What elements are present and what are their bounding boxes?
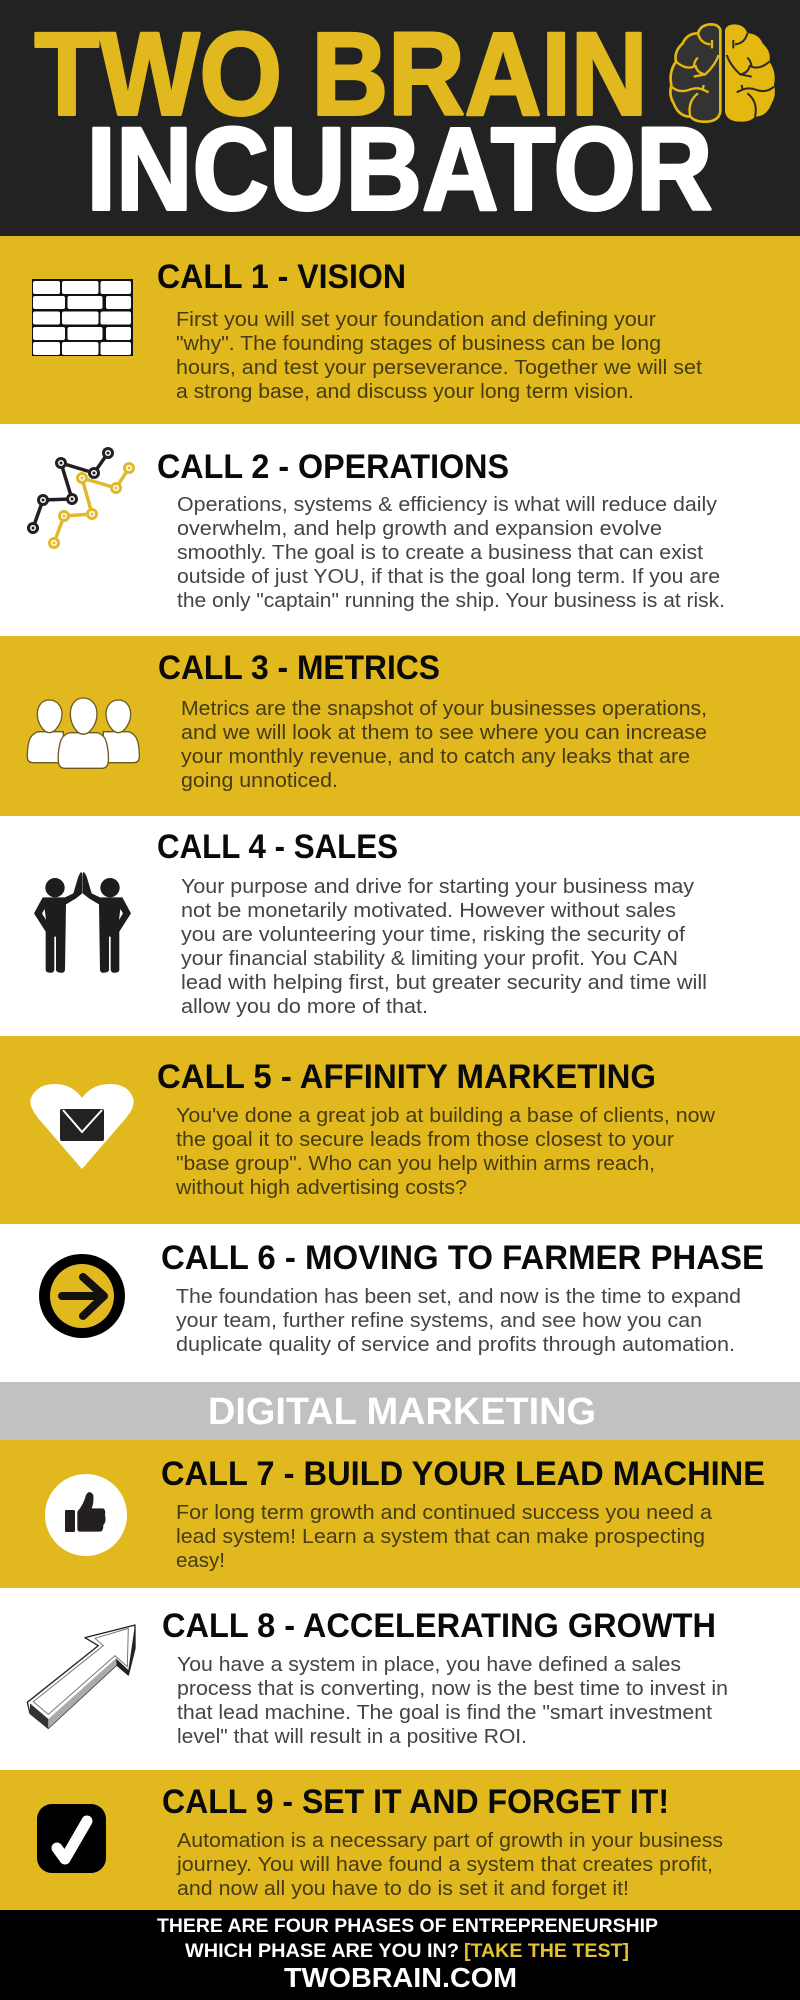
text: call 7 body: easy! bbox=[176, 1549, 225, 1572]
text: call 3 body: going unnoticed. bbox=[181, 769, 338, 792]
heading: call 4: CALL 4 - SALES bbox=[157, 828, 398, 866]
panel: header bbox=[0, 0, 800, 236]
heading: call 3: CALL 3 - METRICS bbox=[158, 649, 440, 687]
icon: heart with envelope bbox=[30, 1084, 134, 1169]
text: call 2 body: the only "captain" running the ship. Your business is at risk. bbox=[177, 589, 725, 612]
icon: arrow in circle bbox=[39, 1254, 125, 1338]
text: call 8 body: level" that will result in a positive ROI. bbox=[177, 1725, 527, 1748]
heading: call 9: CALL 9 - SET IT AND FORGET IT! bbox=[162, 1783, 669, 1821]
text: call 2 body: smoothly. The goal is to create a business that can exist bbox=[177, 541, 703, 564]
panel: call 6 moving to farmer phase bbox=[0, 1224, 800, 1382]
title: incubator: INCUBATOR bbox=[86, 104, 712, 236]
icon: brain bbox=[670, 24, 775, 122]
text: call 4 body: Your purpose and drive for starting your business may bbox=[181, 875, 695, 898]
text: call 8 body bbox=[177, 1653, 728, 1748]
heading: call 5: CALL 5 - AFFINITY MARKETING bbox=[157, 1058, 656, 1096]
panel: call 2 operations bbox=[0, 424, 800, 636]
heading: call 7: CALL 7 - BUILD YOUR LEAD MACHINE bbox=[161, 1455, 765, 1493]
text: call 2 body: Operations, systems & efficiency is what will reduce daily bbox=[177, 493, 718, 516]
text: call 6 body: The foundation has been set, and now is the time to expand bbox=[176, 1285, 741, 1308]
heading: call 6: CALL 6 - MOVING TO FARMER PHASE bbox=[161, 1239, 764, 1277]
banner heading: DIGITAL MARKETING bbox=[208, 1391, 596, 1433]
panel: footer bbox=[0, 1910, 800, 2000]
text: call 3 body: and we will look at them to see where you can increase bbox=[181, 721, 707, 744]
footer line 2: WHICH PHASE ARE YOU IN? bbox=[185, 1940, 459, 1962]
panel: call 5 affinity marketing bbox=[0, 1036, 800, 1224]
footer line 2: [TAKE THE TEST] bbox=[464, 1940, 629, 1962]
text: call 4 body: not be monetarily motivated. However without sales bbox=[181, 899, 676, 922]
text: call 1 body: "why". The founding stages of business can be long bbox=[176, 332, 661, 355]
text: call 5 body: without high advertising costs? bbox=[175, 1176, 467, 1199]
banner: digital marketing bbox=[0, 1382, 800, 1440]
text: call 8 body: You have a system in place, you have defined a sales bbox=[177, 1653, 681, 1676]
text: call 4 body: allow you do more of that. bbox=[181, 995, 428, 1018]
text: call 2 body: outside of just YOU, if that is the goal long term. If you are bbox=[177, 565, 720, 588]
icon: thumbs up in circle bbox=[45, 1474, 127, 1556]
icon: brick wall bbox=[32, 279, 133, 356]
text: call 2 body: overwhelm, and help growth and expansion evolve bbox=[177, 517, 662, 540]
text: call 3 body: your monthly revenue, and to catch any leaks that are bbox=[181, 745, 690, 768]
text: call 8 body: that lead machine. The goal is find the "smart investment bbox=[177, 1701, 712, 1724]
text: call 7 body: lead system! Learn a system that can make prospecting bbox=[176, 1525, 705, 1548]
icon: connected network lines bbox=[28, 448, 134, 548]
text: call 9 body: and now all you have to do is set it and forget it! bbox=[177, 1877, 629, 1900]
icon: sketched arrow bbox=[27, 1625, 135, 1728]
panel: call 9 set it and forget it bbox=[0, 1770, 800, 1910]
text: call 9 body: Automation is a necessary part of growth in your business bbox=[177, 1829, 723, 1852]
text: call 1 body: First you will set your foundation and defining your bbox=[176, 308, 656, 331]
text: call 5 body: "base group". Who can you help within arms reach, bbox=[176, 1152, 655, 1175]
text: call 2 body bbox=[177, 493, 725, 612]
footer website: TWOBRAIN.COM bbox=[284, 1962, 517, 1993]
text: call 5 body: You've done a great job at building a base of clients, now bbox=[176, 1104, 715, 1127]
heading: call 1: CALL 1 - VISION bbox=[157, 258, 406, 296]
text: call 3 body bbox=[181, 697, 707, 792]
text: call 1 body: a strong base, and discuss your long term vision. bbox=[176, 380, 634, 403]
text: call 6 body: duplicate quality of service and profits through automation. bbox=[176, 1333, 735, 1356]
text: call 6 body: your team, further refine systems, and see how you can bbox=[176, 1309, 702, 1332]
panel: call 8 accelerating growth bbox=[0, 1588, 800, 1770]
footer line 2 bbox=[185, 1940, 629, 1962]
text: call 1 body: hours, and test your perseverance. Together we will set bbox=[176, 356, 702, 379]
text: call 5 body: the goal it to secure leads from those closest to your bbox=[176, 1128, 674, 1151]
icon: group of three people bbox=[27, 698, 139, 768]
heading: call 2: CALL 2 - OPERATIONS bbox=[157, 448, 509, 486]
text: call 9 body bbox=[176, 1829, 723, 1900]
footer line 1: THERE ARE FOUR PHASES OF ENTREPRENEURSHIP bbox=[157, 1915, 658, 1937]
icon: two people high five bbox=[34, 872, 131, 973]
panel: call 1 vision bbox=[0, 236, 800, 424]
text: call 5 body bbox=[175, 1104, 715, 1199]
text: call 3 body: Metrics are the snapshot of your businesses operations, bbox=[181, 697, 707, 720]
text: call 7 body bbox=[176, 1501, 713, 1572]
text: call 7 body: For long term growth and continued success you need a bbox=[176, 1501, 713, 1524]
panel: call 4 sales bbox=[0, 816, 800, 1036]
panel: call 3 metrics bbox=[0, 636, 800, 816]
title: two brain: TWO BRAIN bbox=[34, 8, 648, 140]
text: call 4 body: you are volunteering your time, risking the security of bbox=[181, 923, 685, 946]
icon: checkmark bbox=[37, 1804, 106, 1873]
heading: call 8: CALL 8 - ACCELERATING GROWTH bbox=[162, 1607, 716, 1645]
text: call 4 body: lead with helping first, but greater security and time will bbox=[181, 971, 707, 994]
panel: call 7 build your lead machine bbox=[0, 1440, 800, 1588]
text: call 6 body bbox=[176, 1285, 741, 1356]
text: call 9 body: journey. You will have found a system that creates profit, bbox=[176, 1853, 713, 1876]
text: call 8 body: process that is converting, now is the best time to invest in bbox=[177, 1677, 728, 1700]
text: call 4 body: your financial stability & limiting your profit. You CAN bbox=[181, 947, 678, 970]
text: call 4 body bbox=[181, 875, 707, 1018]
text: call 1 body bbox=[176, 308, 702, 403]
